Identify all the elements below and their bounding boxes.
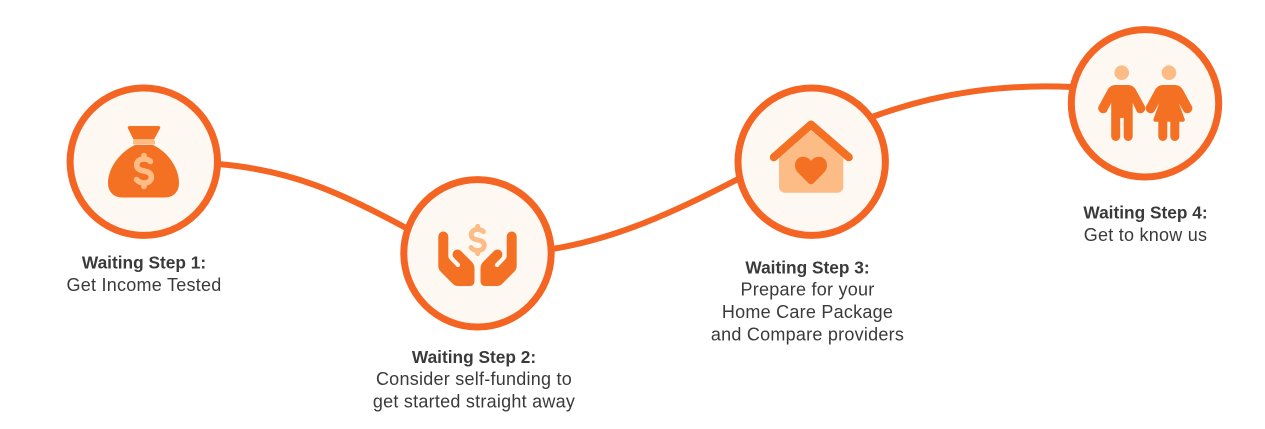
label: step 3 — [711, 258, 904, 344]
label: step 2: Consider self-funding to — [376, 369, 572, 389]
icon: house with heart — [774, 124, 849, 193]
label: step 3: and Compare providers — [711, 324, 904, 344]
icon: hands holding dollar — [438, 226, 517, 286]
label: step 3: Home Care Package — [722, 302, 893, 322]
label: step 2: Waiting Step 2: — [412, 347, 536, 367]
label: step 2 — [373, 347, 575, 412]
label: step 4: Waiting Step 4: — [1083, 202, 1208, 222]
label: step 1: Waiting Step 1: — [82, 252, 206, 272]
connector: step 1 to step 2 — [218, 164, 408, 229]
connector: step 3 to step 4 — [872, 86, 1072, 117]
step 3 circle — [738, 88, 885, 235]
label: step 2: get started straight away — [373, 392, 575, 412]
icon: money bag — [108, 126, 179, 198]
step 1 circle — [70, 88, 218, 235]
icon: two people — [1098, 65, 1192, 141]
label: step 3: Waiting Step 3: — [745, 258, 870, 278]
label: step 1: Get Income Tested — [66, 275, 222, 295]
label: step 1 — [66, 252, 222, 295]
connector: step 2 to step 3 — [552, 178, 740, 249]
label: step 4 — [1083, 202, 1208, 245]
step 4 circle — [1071, 30, 1219, 177]
label: step 4: Get to know us — [1084, 225, 1207, 245]
label: step 3: Prepare for your — [740, 280, 875, 300]
step 2 circle — [404, 180, 551, 327]
